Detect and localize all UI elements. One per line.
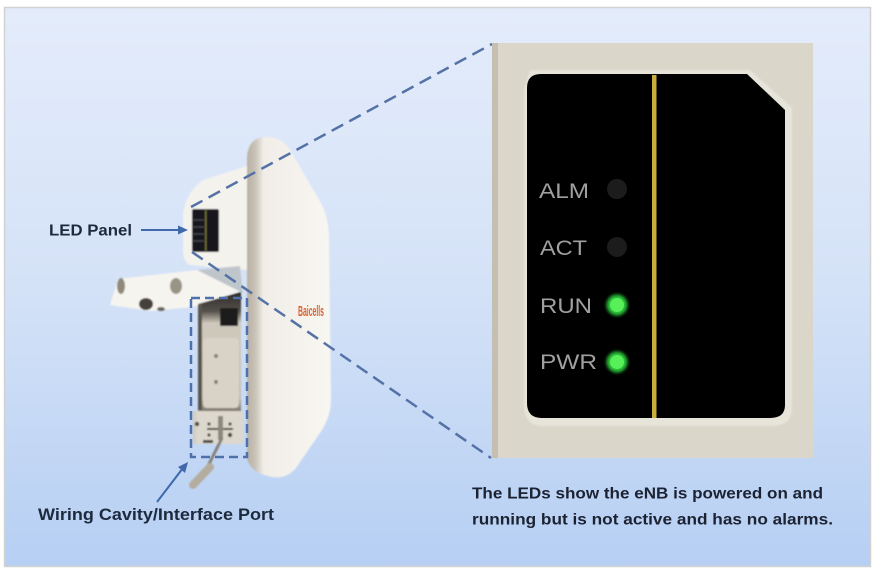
device illustration	[110, 137, 331, 485]
LED Panel label: LED Panel	[49, 222, 132, 240]
LED panel photo	[492, 43, 813, 458]
zoom line bottom	[192, 252, 491, 458]
photo faceplate	[492, 43, 813, 458]
zoom line top	[191, 44, 492, 207]
PWR indicator	[540, 351, 628, 374]
wiring cavity	[198, 292, 241, 412]
device rear housing	[183, 166, 260, 280]
ACT indicator	[540, 237, 627, 260]
mounting bracket	[110, 266, 243, 311]
yellow divider	[652, 75, 656, 418]
RUN indicator	[540, 294, 628, 318]
PWR indicator: PWR	[540, 351, 597, 374]
ALM indicator	[539, 179, 627, 203]
cavity interface plate	[193, 411, 243, 444]
panel recess highlight	[524, 70, 792, 426]
caption: The LEDs show the eNB is powered on and	[472, 486, 823, 502]
caption	[472, 486, 833, 528]
black display panel	[527, 74, 785, 418]
wiring cavity dashed outline	[191, 298, 247, 457]
cavity interior details	[198, 304, 239, 410]
LED Panel arrow	[141, 226, 188, 234]
device main body	[247, 137, 331, 477]
LED panel thumbnail	[192, 209, 219, 252]
Wiring Cavity label: Wiring Cavity/Interface Port	[38, 506, 275, 524]
ALM indicator: ALM	[539, 180, 589, 203]
photo left edge shadow	[492, 43, 498, 458]
RUN indicator: RUN	[540, 295, 592, 318]
cable and connector	[193, 438, 222, 485]
ACT indicator: ACT	[540, 237, 587, 260]
infographic: LED panel diagram: Baicells	[298, 303, 324, 320]
Wiring Cavity arrow	[157, 462, 188, 502]
caption: running but is not active and has no alarms.	[472, 512, 833, 528]
interface port details	[195, 416, 233, 443]
